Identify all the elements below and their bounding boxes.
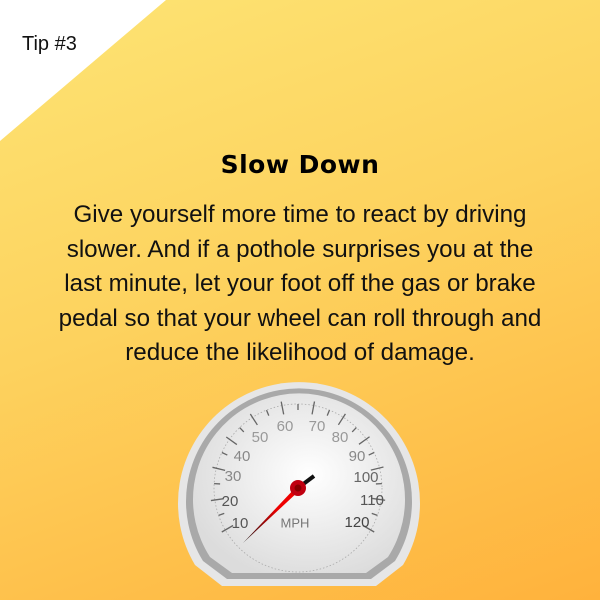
body text: pedal so that your wheel can roll through and xyxy=(59,304,541,332)
speedometer: 50 xyxy=(252,429,268,446)
body text xyxy=(59,201,541,366)
speedometer: 70 xyxy=(309,418,325,435)
speedometer: 40 xyxy=(234,448,250,465)
speedometer: 100 xyxy=(353,469,379,486)
body text: last minute, let your foot off the gas or brake xyxy=(64,270,536,297)
speedometer: 120 xyxy=(344,514,370,531)
white corner triangle xyxy=(0,0,166,141)
body text: slower. And if a pothole surprises you at the xyxy=(67,236,533,262)
speedometer: 30 xyxy=(225,468,241,485)
speedometer: 20 xyxy=(222,493,238,510)
tip label: Tip #3 xyxy=(22,33,77,55)
speedometer: 90 xyxy=(349,448,365,465)
title: Slow Down xyxy=(221,150,379,179)
speedometer: MPH xyxy=(281,515,309,530)
speedometer: 60 xyxy=(277,418,293,435)
speedometer: 80 xyxy=(332,429,348,446)
body text: reduce the likelihood of damage. xyxy=(125,339,475,366)
body text: Give yourself more time to react by driving xyxy=(73,201,526,228)
speedometer: 10 xyxy=(232,515,248,532)
speedometer: 110 xyxy=(360,492,384,509)
